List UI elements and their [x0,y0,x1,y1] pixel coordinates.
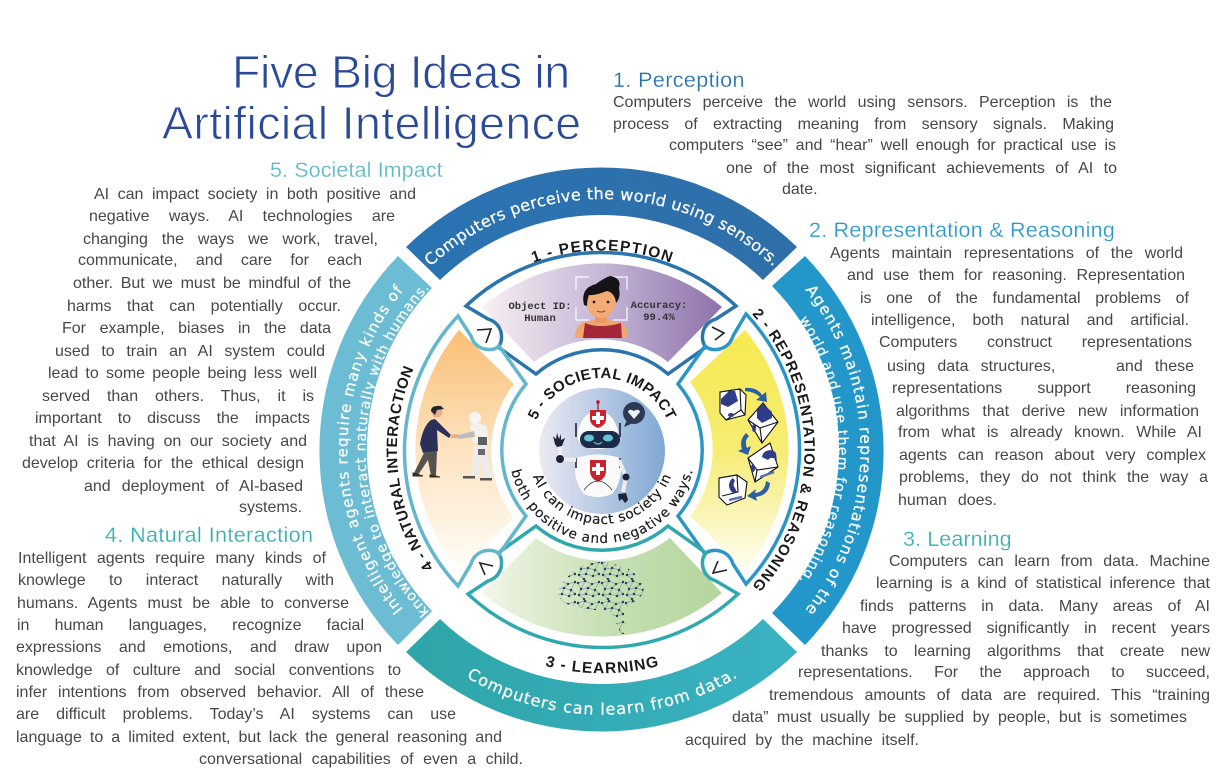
detection labels: Accuracy: [631,300,687,312]
text block: perception: computers “see” and “hear” well enough for practical use is [669,137,1116,154]
text block: societal impact: For example, biases in the data [62,320,331,337]
text block: natural interaction: language to a limited extent, but lack the general reasoning and [16,729,502,746]
text block: societal impact: AI can impact society in both positive and [94,186,416,203]
text block: learning: learning is a kind of statistical inference that [876,575,1210,592]
text block: natural interaction: expressions and emotions, and draw upon [16,639,382,656]
arrows between segments [477,327,727,575]
text block: learning: representations. For the approach to succeed, [798,664,1210,681]
band: learning [406,619,797,732]
segment labels: 4 - NATURAL INTERACTION [386,366,432,569]
heading: 3. Learning: 3. Learning [903,527,1012,551]
heading: 2. Representation & Reasoning: 2. Representation & Reasoning [809,218,1115,242]
text block: societal impact [22,186,416,516]
segment: perception [466,252,736,374]
text block: learning: tremendous amounts of data are required. This “training [769,687,1210,704]
text block: representation and reasoning: and use them for reasoning. Representation [847,267,1185,284]
heading: 5. Societal Impact: 5. Societal Impact [270,158,443,182]
text block: societal impact: develop criteria for the ethical design [22,455,304,472]
text block: natural interaction: are difficult problems. Today’s AI systems can use [16,706,456,723]
icon: neural network brain [558,562,644,634]
segment: natural interaction [404,316,526,586]
text block: representation and reasoning: Computers construct representations [879,334,1192,351]
central labels: 5 - SOCIETAL IMPACT [528,368,677,419]
heading: 4. Natural Interaction: 4. Natural Interaction [105,523,313,547]
band: natural interaction [319,256,432,645]
band: natural interaction: Intelligent agents require many kinds of [337,283,402,616]
band: representation and reasoning: world and use them for reasoning. [800,316,849,580]
icon: robot [553,400,645,503]
text block: learning: acquired by the machine itself. [685,732,919,749]
text block: learning: Computers can learn from data. Machine [889,553,1210,570]
text block: natural interaction [16,550,523,768]
icon: handshake man and robot [413,406,492,480]
text block: learning: thanks to learning algorithms that create new [821,643,1210,660]
segment labels: 3 - LEARNING [546,656,658,674]
text block: natural interaction: Intelligent agents require many kinds of [18,550,326,567]
text block: societal impact: served than others. Thus, it is [42,388,314,405]
text block: representation and reasoning: problems, they do not think the way a [899,469,1208,486]
central labels [512,368,692,544]
text block: representation and reasoning: algorithms that derive new information [896,403,1199,420]
text block: representation and reasoning: agents can reason about very complex [899,447,1206,464]
text block: representation and reasoning: from what is already known. While AI [898,424,1202,441]
text block: natural interaction: infer intentions from observed behavior. All of these [16,684,424,701]
text block: societal impact: communicate, and care for each [78,252,362,269]
icon: curved arrows between cubes [738,388,770,501]
icon: cubes with arrows [719,389,778,505]
text block: natural interaction: humans. Agents must be able to converse [17,595,349,612]
text block: representation and reasoning: human does. [898,492,997,509]
segment: representation [678,314,800,584]
text block: representation and reasoning: representations support reasoning [892,380,1196,397]
text block: representation and reasoning: is one of the fundamental problems of [860,290,1189,307]
text block: perception: Computers perceive the world using sensors. Perception is the [613,94,1112,111]
band: learning: Computers can learn from data. [468,669,736,715]
detection labels: 99.4% [643,312,675,324]
text block: societal impact: lead to some people being less well [48,365,317,382]
text block: natural interaction: knowledge of culture and social conventions to [16,662,401,679]
band: natural interaction: knowledge to interact naturally with humans. [356,288,429,618]
text block: representation and reasoning [830,245,1208,509]
text block: learning: data” must usually be supplied by people, but is sometimes [732,709,1187,726]
title: Five Big Ideas in [232,46,570,98]
text block: natural interaction: knowlege to interact naturally with [18,572,334,589]
title [162,46,581,149]
text block: perception: date. [782,181,818,198]
text block: societal impact: and deployment of AI-based [84,478,303,495]
central circle [512,368,692,544]
band: representation and reasoning: Agents maintain representations of the [805,286,870,614]
text block: natural interaction: conversational capabilities of even a child. [199,751,523,768]
segment labels: 2 - REPRESENTATION & REASONING [752,308,815,590]
text block: societal impact: harms that can potentially occur. [67,298,341,315]
text block: societal impact: other. But we must be mindful of the [73,275,351,292]
central labels: AI can impact society in [532,475,671,525]
text block: learning [685,553,1210,749]
text block: perception: one of the most significant achievements of AI to [726,160,1117,177]
text block: representation and reasoning: using data structures, and these [887,358,1194,375]
detection labels: Object ID: [508,301,572,313]
text block: perception [613,94,1117,198]
text block: natural interaction: in human languages, recognize facial [17,617,364,634]
segment labels [386,240,815,674]
text block: learning: finds patterns in data. Many areas of AI [860,598,1210,615]
band: perception: Computers perceive the world using sensors. [425,186,774,266]
text block: perception: process of extracting meaning from sensory signals. Making [613,116,1114,133]
detection labels [508,300,687,325]
segment: learning [468,526,738,648]
text block: societal impact: systems. [239,499,302,516]
text block: representation and reasoning: Agents maintain representations of the world [830,245,1183,262]
detection labels: Human [524,313,556,325]
text block: representation and reasoning: intelligence, both natural and artificial. [871,312,1189,329]
segment labels: 1 - PERCEPTION [532,240,673,262]
text block: societal impact: that AI is having on our society and [29,433,307,450]
text block: societal impact: changing the ways we work, travel, [83,231,378,248]
heading: 1. Perception: 1. Perception [613,68,745,92]
text block: learning: have progressed significantly in recent years [842,620,1210,637]
text block: societal impact: important to discuss the impacts [35,410,310,427]
central labels: both positive and negative ways. [512,469,692,544]
title: Artificial Intelligence [162,97,581,149]
text block: societal impact: used to train an AI system could [55,343,325,360]
text block: societal impact: negative ways. AI technologies are [89,208,395,225]
band: representation and reasoning [772,256,884,645]
icon: object detection woman [575,276,628,338]
